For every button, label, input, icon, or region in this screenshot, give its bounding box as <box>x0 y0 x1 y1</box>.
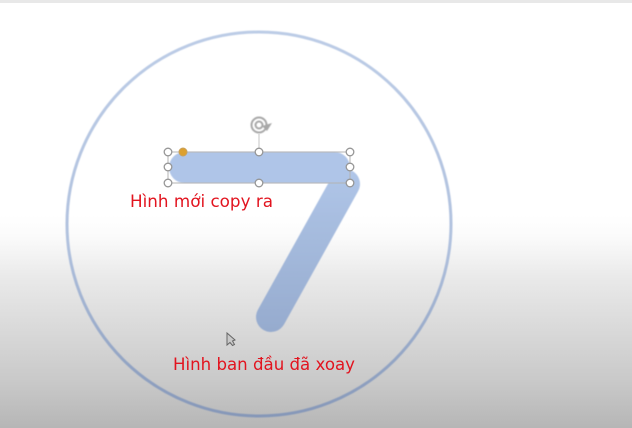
selection frame with handles <box>164 118 354 187</box>
label: original rotated shape: Hình ban đầu đã xoay <box>173 355 355 374</box>
circle outline <box>67 32 451 416</box>
original shape, rotated <box>271 184 345 317</box>
adjustment handle <box>179 148 187 156</box>
label: new copied shape: Hình mới copy ra <box>130 192 273 211</box>
copied shape, horizontal bar <box>169 152 350 183</box>
rotate handle icon <box>252 118 272 132</box>
icon: mouse cursor <box>227 333 235 346</box>
resize handles <box>164 148 354 187</box>
